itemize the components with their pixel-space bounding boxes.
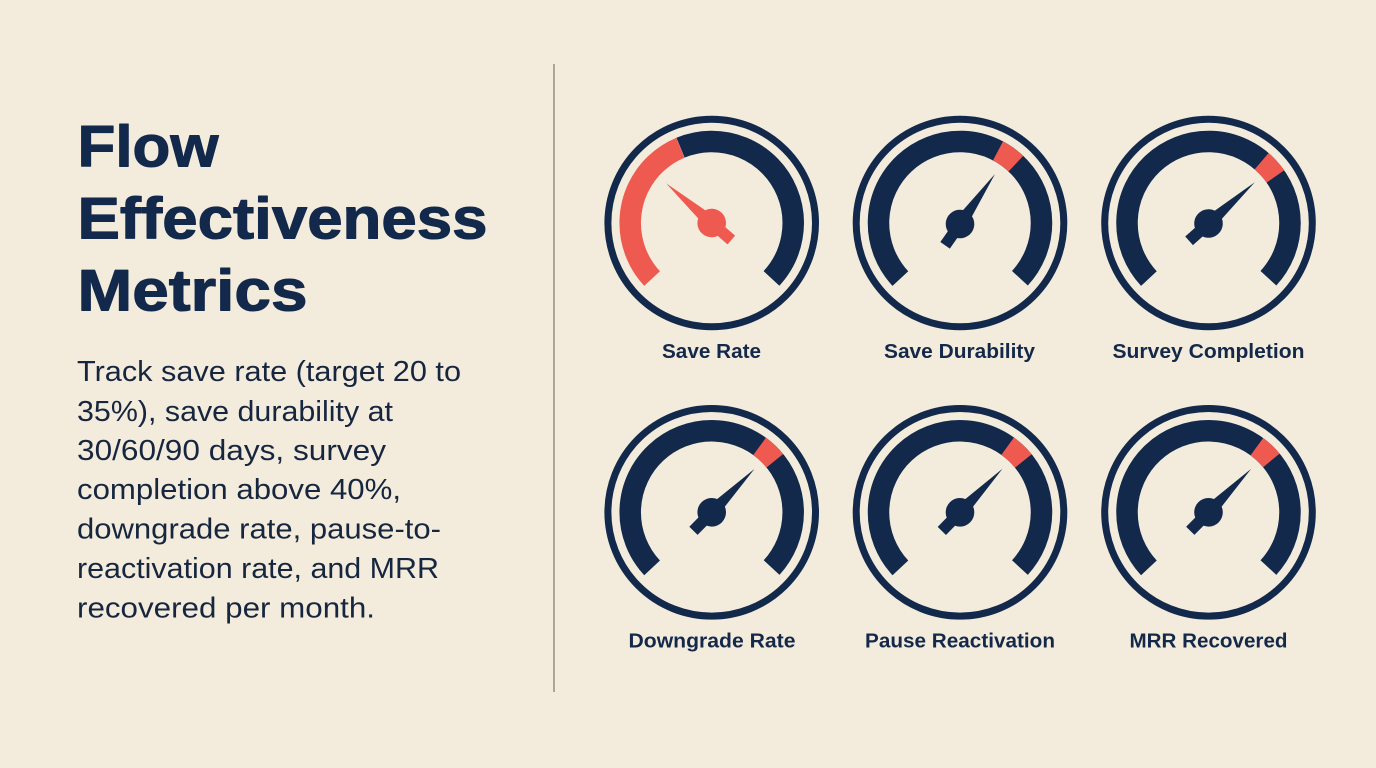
gauge: Downgrade Rate: [597, 397, 827, 652]
needle: [933, 166, 1007, 254]
panel: left text column: [77, 114, 488, 624]
title: [78, 114, 488, 324]
title: Metrics: [78, 258, 308, 324]
body text: recovered per month.: [77, 592, 375, 624]
label: Save Durability: [884, 341, 1036, 363]
body text: completion above 40%,: [77, 474, 401, 506]
body text: 35%), save durability at: [77, 396, 393, 428]
body text: Track save rate (target 20 to: [77, 356, 461, 388]
label: MRR Recovered: [1130, 630, 1288, 652]
gauge: Save Rate: [597, 108, 827, 363]
needle: [1180, 459, 1261, 541]
label: Save Rate: [662, 341, 761, 363]
title: Effectiveness: [78, 186, 488, 252]
title: Flow: [78, 114, 219, 180]
gauge: Save Durability: [845, 108, 1075, 363]
needle: [683, 459, 765, 541]
label: Pause Reactivation: [865, 630, 1055, 652]
label: Survey Completion: [1112, 341, 1304, 363]
panel: gauges: [597, 108, 1324, 652]
gauge: MRR Recovered: [1093, 397, 1324, 652]
body text: 30/60/90 days, survey: [77, 435, 387, 467]
body text: [77, 356, 461, 624]
label: Downgrade Rate: [628, 630, 796, 652]
needle: [932, 459, 1013, 541]
gauge: Pause Reactivation: [845, 397, 1075, 652]
needle: [1180, 172, 1264, 251]
gauge: Survey Completion: [1093, 108, 1324, 363]
body text: reactivation rate, and MRR: [77, 553, 439, 585]
body text: downgrade rate, pause-to-: [77, 514, 441, 546]
needle: [657, 173, 741, 251]
